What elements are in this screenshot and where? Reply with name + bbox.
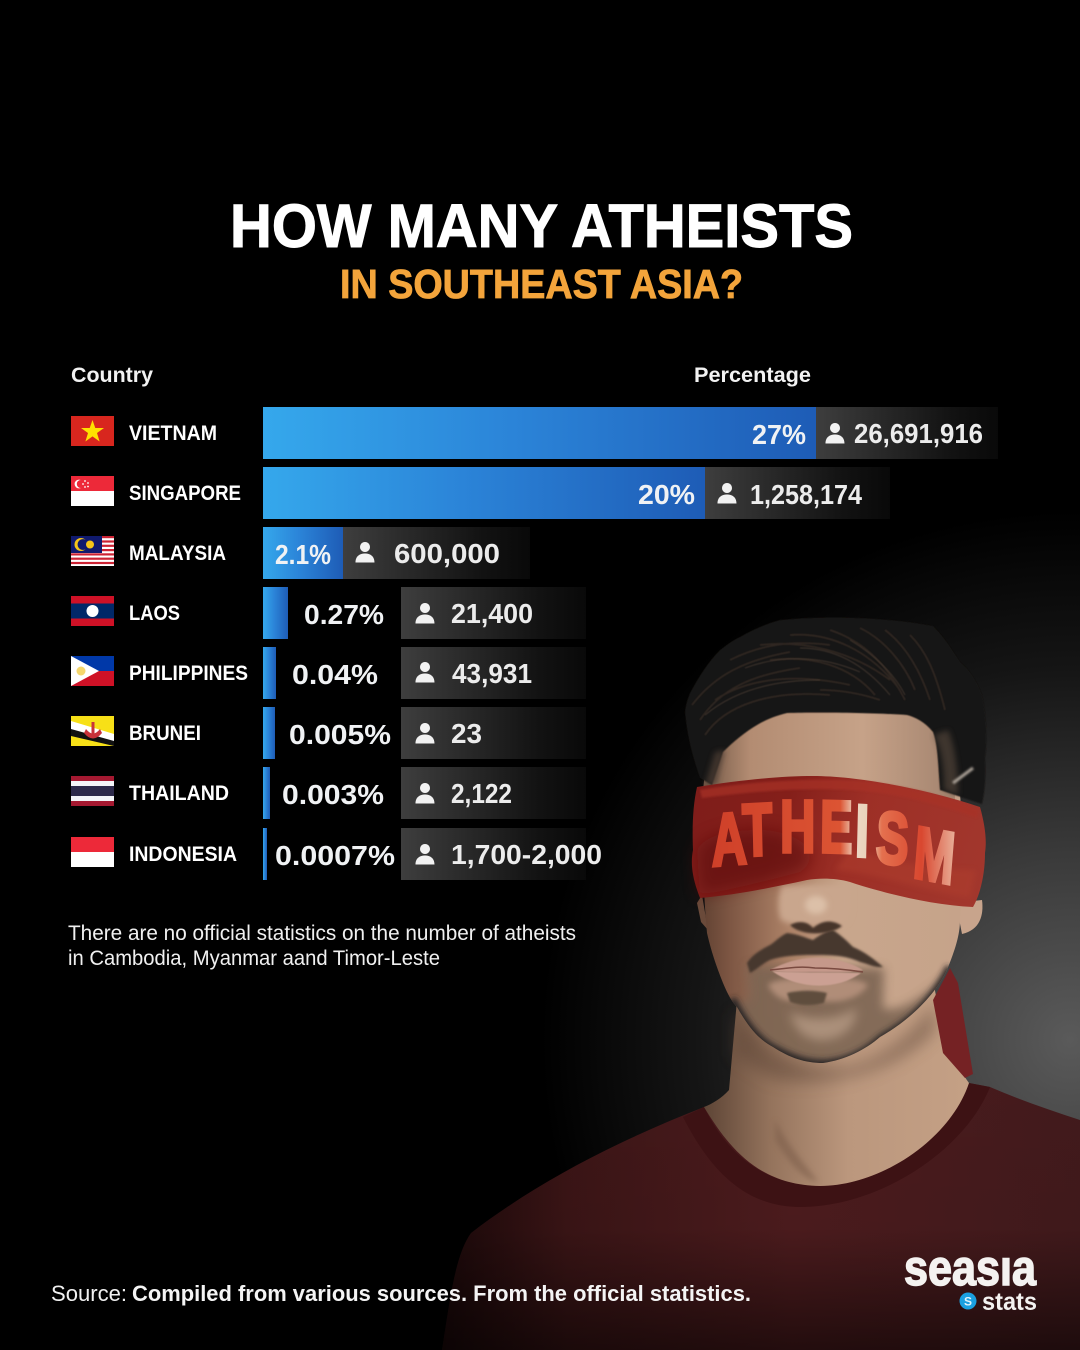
icon: person xyxy=(416,723,434,744)
row: Philippines: 43,931 xyxy=(452,658,532,689)
row: Vietnam: 26,691,916 xyxy=(854,418,983,449)
forehead xyxy=(702,705,955,800)
logo: stats xyxy=(982,1288,1037,1316)
row: Thailand: 2,122 xyxy=(451,778,512,809)
nose xyxy=(778,885,851,933)
row: Indonesia: 1,700-2,000 xyxy=(451,839,602,870)
icon: person xyxy=(416,662,434,682)
title xyxy=(230,192,853,307)
row: Indonesia: 0.0007% xyxy=(275,840,395,871)
row: Malaysia: 2.1% xyxy=(275,539,331,570)
icon: person xyxy=(416,783,434,804)
photo: blindfolded man xyxy=(442,618,1080,1350)
note xyxy=(68,922,576,970)
logo icon: S xyxy=(964,1294,972,1308)
row: Thailand: THAILAND xyxy=(129,782,229,805)
row: Philippines: 0.04% xyxy=(292,659,378,690)
row: Singapore xyxy=(71,467,890,519)
ribbon word: ATHEISM xyxy=(710,786,958,901)
row: Brunei: BRUNEI xyxy=(129,722,201,745)
flag: Malaysia xyxy=(71,536,114,566)
ribbon tail xyxy=(933,968,973,1078)
icon: person xyxy=(416,844,434,864)
shirt xyxy=(442,1083,1080,1350)
row: Vietnam: 27% xyxy=(752,419,806,450)
icon: person xyxy=(826,423,844,444)
row: Malaysia: 600,000 xyxy=(394,538,500,569)
row: Laos: LAOS xyxy=(129,602,180,625)
row: Thailand xyxy=(71,767,586,819)
row: Singapore: SINGAPORE xyxy=(129,482,241,505)
row: Indonesia: INDONESIA xyxy=(129,843,237,866)
source: Compiled from various sources. From the official statistics. xyxy=(132,1281,751,1306)
neck shadow xyxy=(735,1000,935,1081)
flag: Indonesia xyxy=(71,837,114,867)
row: Vietnam xyxy=(71,407,998,459)
column headers xyxy=(71,364,811,387)
flag: Laos xyxy=(71,596,114,626)
icon: person xyxy=(718,483,736,504)
row: Indonesia xyxy=(71,828,602,880)
note: There are no official statistics on the number of atheists xyxy=(68,922,576,945)
column headers: Percentage xyxy=(694,364,811,387)
flag: Singapore xyxy=(71,476,114,506)
row: Vietnam: VIETNAM xyxy=(129,422,217,445)
collarbone shading xyxy=(775,1120,818,1182)
row: Brunei: 0.005% xyxy=(289,719,391,750)
beard xyxy=(730,930,955,1070)
row: Malaysia: MALAYSIA xyxy=(129,542,226,565)
icon: person xyxy=(356,542,374,562)
subtitle: IN SOUTHEAST ASIA? xyxy=(340,261,743,307)
flag: Philippines xyxy=(71,656,114,686)
row: Singapore: 1,258,174 xyxy=(750,479,862,510)
note: in Cambodia, Myanmar aand Timor-Leste xyxy=(68,947,440,970)
source: Source: xyxy=(51,1281,127,1306)
face xyxy=(703,700,962,1063)
hair xyxy=(685,618,986,804)
flag: Brunei xyxy=(71,716,114,746)
title: HOW MANY ATHEISTS xyxy=(230,192,853,260)
flag: Vietnam xyxy=(71,416,114,446)
background glow xyxy=(500,500,1080,1350)
flag: Thailand xyxy=(71,776,114,806)
row: Philippines: PHILIPPINES xyxy=(129,662,248,685)
row: Malaysia xyxy=(71,527,530,579)
icon: person xyxy=(416,603,434,624)
logo: seasia xyxy=(904,1240,1037,1296)
row: Laos xyxy=(71,587,586,639)
blindfold xyxy=(692,776,986,907)
row: Laos: 0.27% xyxy=(304,599,384,630)
row: Brunei: 23 xyxy=(451,718,482,749)
logo xyxy=(904,1257,1037,1310)
row: Philippines xyxy=(71,647,586,699)
row: Laos: 21,400 xyxy=(451,598,533,629)
row: Thailand: 0.003% xyxy=(282,779,384,810)
neck xyxy=(704,980,969,1186)
row: Brunei xyxy=(71,707,586,759)
row: Singapore: 20% xyxy=(638,479,695,510)
column headers: Country xyxy=(71,364,153,387)
right ear xyxy=(956,900,982,934)
left ear xyxy=(697,895,708,930)
